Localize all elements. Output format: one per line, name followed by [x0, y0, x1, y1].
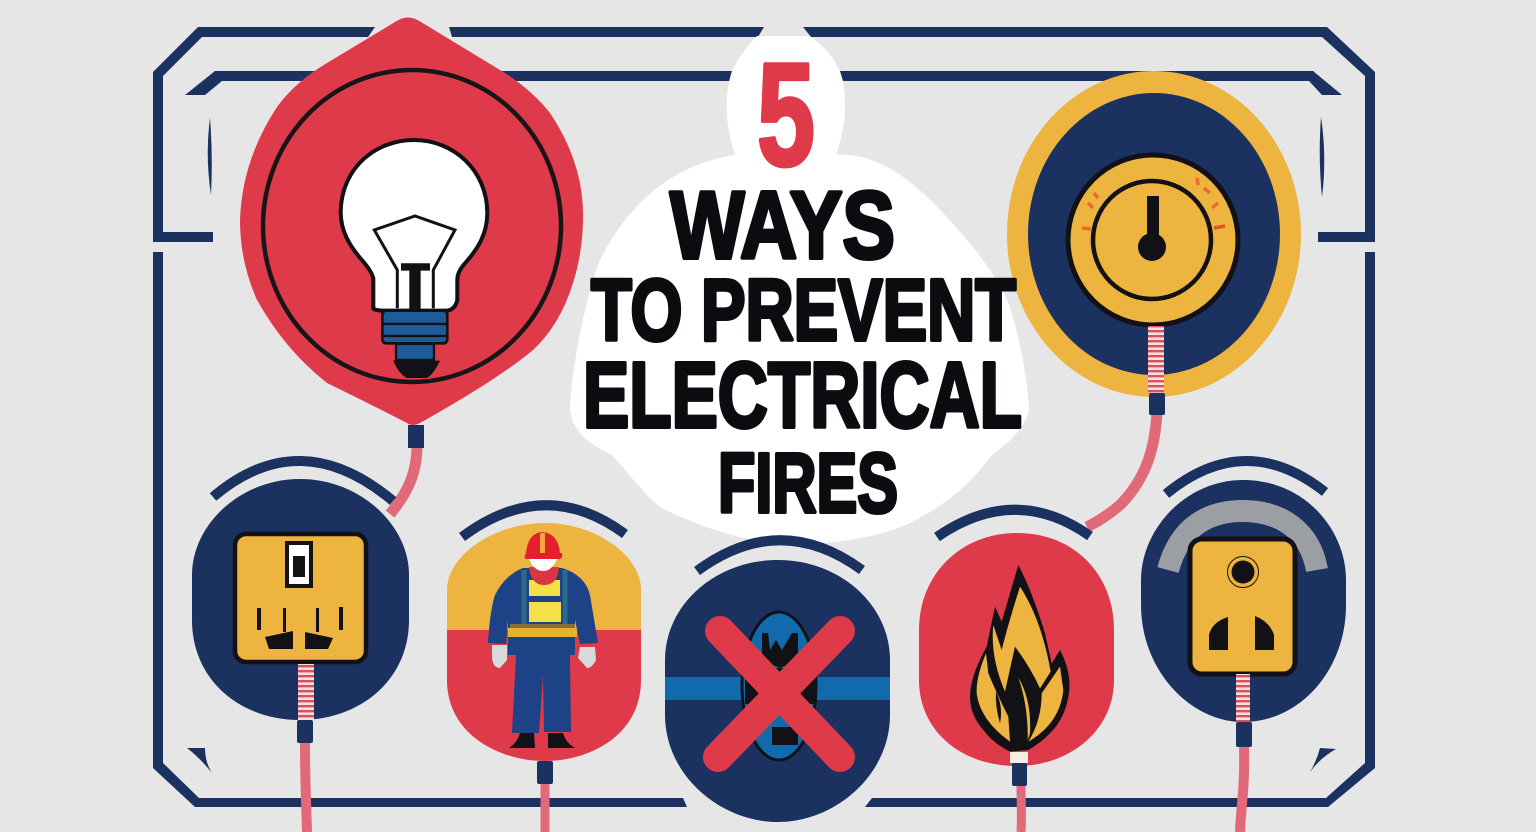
- boots: [509, 733, 575, 748]
- connector: [408, 425, 424, 448]
- title line: FIRES: FIRES: [718, 436, 898, 530]
- needle: [1138, 196, 1166, 261]
- striped cord: [1236, 674, 1250, 722]
- gauge dial: [1068, 155, 1238, 325]
- cord collar: [1010, 752, 1028, 763]
- icon: flame: [970, 565, 1069, 752]
- badge red bottom: [447, 630, 641, 761]
- scarf: [529, 567, 559, 585]
- red badge: [919, 533, 1114, 766]
- arc: [697, 540, 862, 571]
- arc: [1166, 461, 1325, 494]
- tool belt: [508, 624, 577, 637]
- red cross: [718, 631, 840, 757]
- yellow badge: [1007, 71, 1301, 397]
- navy badge: [192, 479, 409, 720]
- heat ticks: [1082, 178, 1225, 229]
- trousers: [512, 655, 571, 733]
- switch: [285, 541, 313, 588]
- icon: light bulb: [341, 140, 487, 378]
- panel: electrician: [447, 505, 641, 832]
- arc: [462, 505, 625, 537]
- panel: wall outlet: [1141, 461, 1346, 832]
- navy outer frame: [153, 27, 1375, 807]
- panel: gauge: [1007, 71, 1301, 415]
- title line: ELECTRICAL: ELECTRICAL: [583, 343, 1022, 447]
- outlet centre shadow: [745, 668, 815, 704]
- yellow socket plate: [235, 534, 366, 662]
- socket pins: [257, 607, 343, 649]
- connector: [1012, 763, 1027, 786]
- title backdrop blob: [570, 36, 1029, 544]
- number 5: 5: [757, 33, 815, 197]
- cord: gauge to flame: [1087, 412, 1157, 527]
- arc: [937, 510, 1090, 537]
- figure: worker: [488, 532, 598, 748]
- navy badge: [1141, 480, 1346, 722]
- grounding hole: [1228, 556, 1258, 588]
- face mask: [529, 559, 557, 571]
- harness straps: [524, 570, 565, 625]
- yellow socket plate: [1190, 539, 1295, 674]
- hard hat: [524, 532, 562, 559]
- connector: [1236, 722, 1252, 747]
- connector: [297, 720, 313, 743]
- socket slots: [1209, 616, 1274, 650]
- panel: no overloaded outlet: [665, 540, 890, 822]
- cord: [1240, 747, 1244, 832]
- title: [583, 33, 1022, 530]
- navy badge: [665, 560, 890, 822]
- outlet disc: [742, 612, 816, 760]
- panel: wall socket with switch: [192, 461, 409, 832]
- hat stripe: [540, 533, 545, 553]
- inner dial ring: [1093, 181, 1211, 299]
- badge yellow top: [447, 523, 641, 630]
- badge ring: [263, 70, 561, 382]
- blue band: [665, 677, 890, 700]
- vest panels: [529, 580, 561, 622]
- grey arc: [1168, 511, 1317, 570]
- cord: bulb to socket: [390, 446, 417, 514]
- cord: [540, 784, 550, 832]
- connector: [537, 761, 553, 784]
- cord: [1016, 786, 1026, 832]
- cord: [305, 743, 307, 832]
- outlet pins: [762, 633, 798, 745]
- gloves: [492, 645, 596, 668]
- title line: WAYS: WAYS: [670, 172, 895, 279]
- striped cord: [1148, 326, 1164, 393]
- arc: [213, 461, 393, 501]
- panel: flame: [919, 510, 1114, 832]
- panel: light bulb: [240, 18, 583, 448]
- title line: TO PREVENT: TO PREVENT: [591, 262, 1016, 359]
- jacket: [488, 568, 598, 655]
- navy disc: [1028, 93, 1280, 375]
- red badge: [240, 18, 583, 425]
- striped cord: [298, 664, 314, 720]
- connector: [1149, 393, 1165, 415]
